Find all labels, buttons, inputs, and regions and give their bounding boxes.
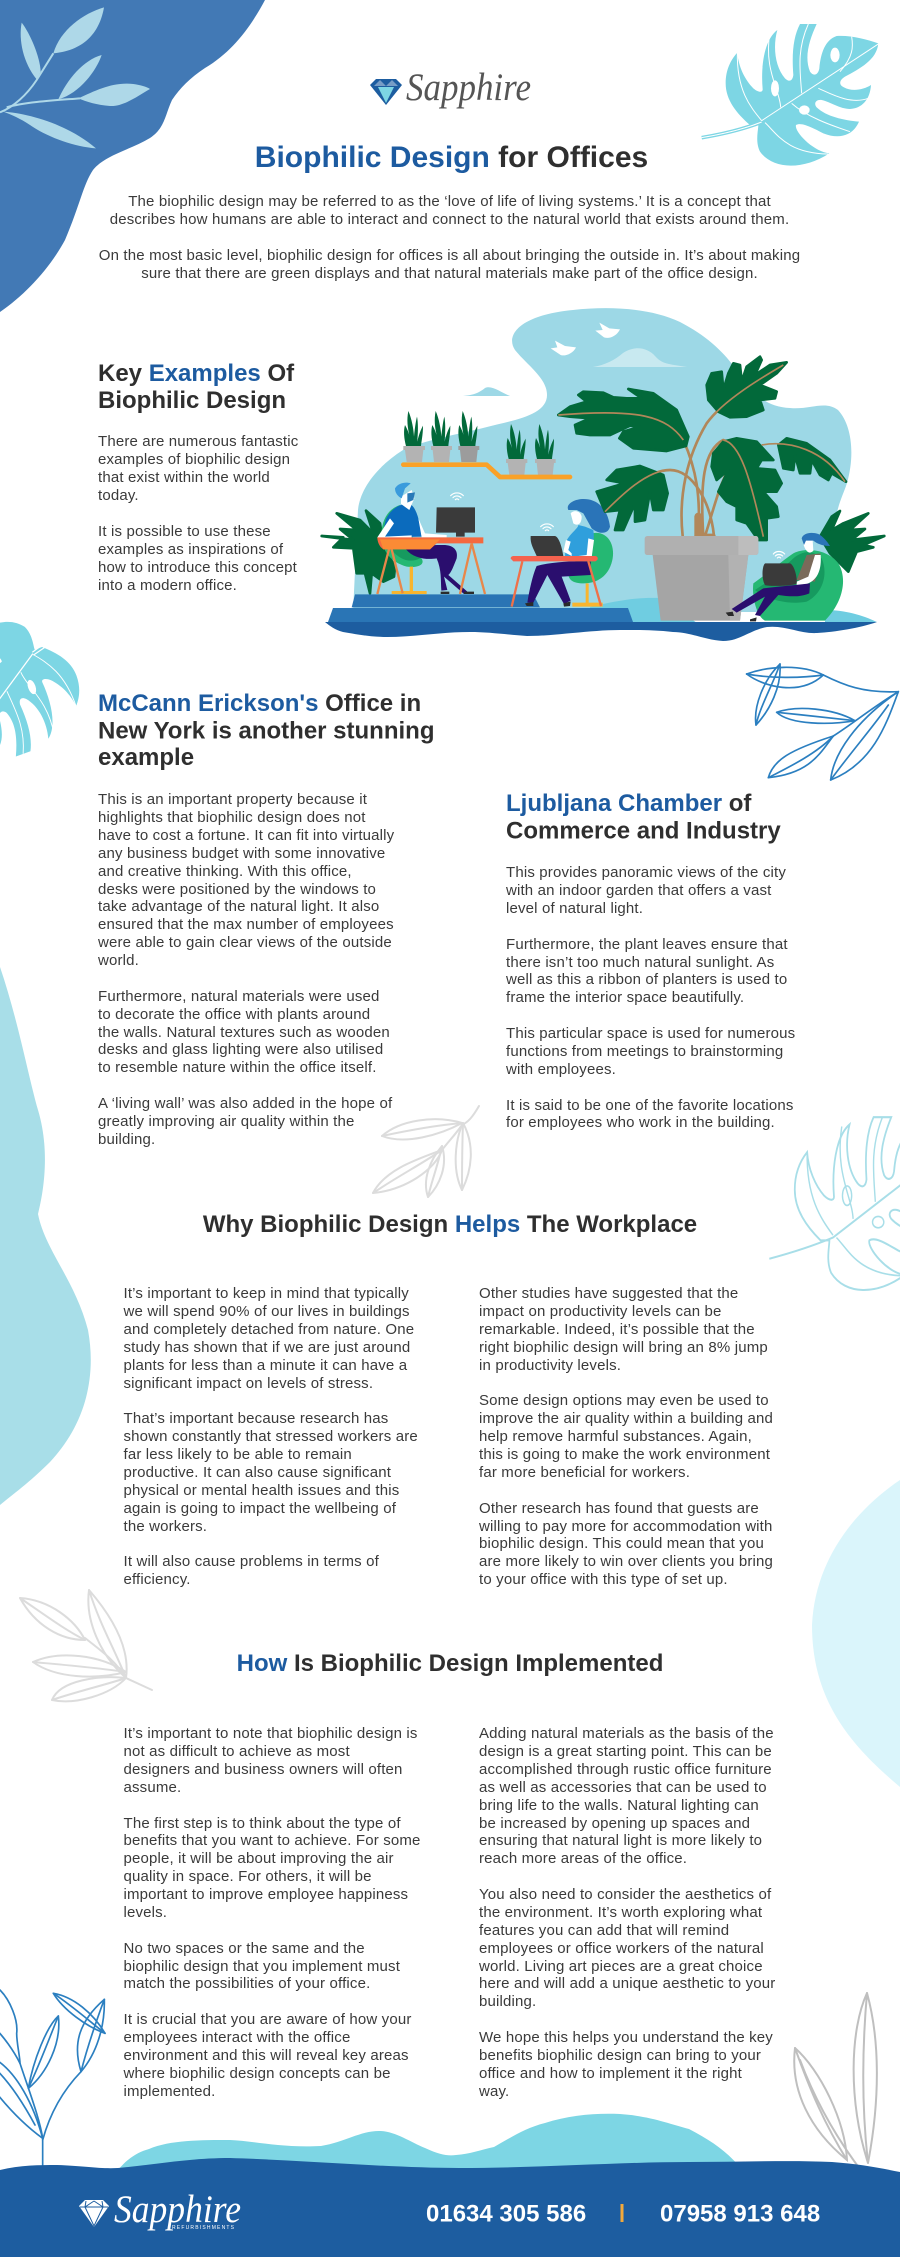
text: how left column: quality in space. For others, it will be xyxy=(124,1868,372,1885)
text: how left column xyxy=(122,1725,421,2100)
text: McCann: any business budget with some innovative xyxy=(98,845,385,862)
text: how right column xyxy=(478,1725,775,2100)
heading: Ljubljana: Commerce and Industry xyxy=(506,818,781,844)
wifi icon left xyxy=(451,493,463,500)
logo: Sapphire top xyxy=(370,66,531,109)
floor wave xyxy=(325,622,877,641)
footer hills xyxy=(118,2114,738,2175)
heading: Ljubljana: Ljubljana Chamber of xyxy=(506,790,751,817)
text: key examples: how to introduce this concept xyxy=(98,559,298,576)
leaf veins xyxy=(558,365,845,537)
big plant leaves xyxy=(558,357,846,540)
text: why left column: and completely detached from nature. One xyxy=(124,1321,414,1338)
text: how right column: bring life to the walls. Natural lighting can xyxy=(479,1797,759,1814)
text: how left column: important to improve employee happiness xyxy=(124,1886,408,1903)
birds xyxy=(551,323,620,355)
text: why left column: plants for less than a minute it can have a xyxy=(124,1357,408,1374)
text: why left column: again is going to impact the wellbeing of xyxy=(124,1500,397,1517)
background blob: top left xyxy=(0,0,265,312)
text: how right column: be increased by opening up spaces and xyxy=(479,1815,750,1832)
text: how right column: here and will add a unique aesthetic to your xyxy=(479,1975,775,1992)
text: how left column: biophilic design that you implement must xyxy=(124,1958,401,1975)
text: key examples: examples of biophilic design xyxy=(98,451,290,468)
text: why right column: biophilic design. This could mean that you xyxy=(479,1535,764,1552)
text: how left column: The first step is to think about the type of xyxy=(124,1815,401,1832)
text: how left column: benefits that you want to achieve. For some xyxy=(124,1832,421,1849)
text: how right column: way. xyxy=(478,2083,509,2100)
icon: diamond xyxy=(370,79,402,105)
text: how right column: reach more areas of the office. xyxy=(479,1850,687,1867)
left bush xyxy=(322,511,395,593)
text: why right column: right biophilic design will bring an 8% jump xyxy=(479,1339,768,1356)
text: Ljubljana: This provides panoramic views of the city xyxy=(506,864,786,881)
text: McCann: building. xyxy=(98,1131,155,1148)
monstera outline: right xyxy=(769,1117,900,1290)
text: how left column: levels. xyxy=(124,1904,167,1921)
text: how right column: employees or office workers of the natural xyxy=(479,1940,764,1957)
text: Ljubljana: frame the interior space beautifully. xyxy=(506,989,744,1006)
heading: key examples: Biophilic Design xyxy=(98,387,286,414)
text: McCann: A ‘living wall’ was also added in the hope of xyxy=(98,1095,393,1112)
intro text: On the most basic level, biophilic design for offices is all about bringing the outside in. It’s about making xyxy=(99,247,800,264)
text: Ljubljana: well as this a ribbon of planters is used to xyxy=(505,971,787,988)
logo wordmark: Sapphire xyxy=(406,66,531,109)
text: how right column: Adding natural materials as the basis of the xyxy=(479,1725,774,1742)
text: McCann xyxy=(97,791,395,1148)
intro text: describes how humans are able to interact and connect to the natural world that exists around them. xyxy=(110,211,789,228)
text: why right column: Other studies have suggested that the xyxy=(479,1285,738,1302)
text: why right column: in productivity levels. xyxy=(479,1357,621,1374)
desk: coral xyxy=(511,556,598,561)
text: McCann: to resemble nature within the office itself. xyxy=(98,1059,377,1076)
text: how right column: features you can add that will remind xyxy=(479,1922,729,1939)
text: key examples: examples as inspirations of xyxy=(98,541,284,558)
text: Ljubljana: with employees. xyxy=(505,1061,616,1078)
text: how left column: It is crucial that you are aware of how your xyxy=(124,2011,412,2028)
monstera leaf: mid left xyxy=(0,596,116,776)
footer tagline: REFURBISHMENTS xyxy=(172,2225,235,2231)
text: why left column: significant impact on levels of stress. xyxy=(124,1375,373,1392)
text: how left column: environment and this will reveal key areas xyxy=(124,2047,409,2064)
text: how left column: not as difficult to achieve as most xyxy=(124,1743,350,1760)
text: how left column: No two spaces or the same and the xyxy=(124,1940,365,1957)
right bush xyxy=(820,511,884,572)
separator xyxy=(620,2204,624,2222)
text: McCann: were able to gain clear views of the outside xyxy=(97,934,392,951)
heading: McCann: example xyxy=(98,744,194,771)
text: how right column: design is a great starting point. This can be xyxy=(479,1743,772,1760)
text: why right column: help remove harmful substances. Again, xyxy=(479,1428,752,1445)
background blob: mid left xyxy=(0,967,91,1505)
footer logo xyxy=(79,2188,241,2231)
text: how right column: benefits biophilic design can bring to your xyxy=(479,2047,761,2064)
illustration: biophilic office xyxy=(322,308,884,641)
monitor xyxy=(436,507,475,537)
text: why left column: physical or mental health issues and this xyxy=(124,1482,399,1499)
text: how right column: building. xyxy=(479,1993,536,2010)
cloud large xyxy=(593,348,687,367)
text: McCann: This is an important property because it xyxy=(98,791,368,808)
text: how right column: accomplished through rustic office furniture xyxy=(479,1761,772,1778)
text: key examples: There are numerous fantastic xyxy=(98,433,299,450)
text: Ljubljana: there isn’t too much natural sunlight. As xyxy=(506,954,774,971)
text: how left column: people, it will be about improving the air xyxy=(124,1850,394,1867)
text: McCann: to decorate the office with plants around xyxy=(98,1006,370,1023)
left scene xyxy=(322,411,613,607)
text: McCann: have to cost a fortune. It can fit into virtually xyxy=(98,827,395,844)
text: why right column: to your office with this type of set up. xyxy=(479,1571,728,1588)
man's chair stand xyxy=(392,567,427,594)
heading: why: Why Biophilic Design Helps The Workplace xyxy=(203,1211,697,1238)
blue outline plant: bottom left xyxy=(0,1990,105,2165)
lower step xyxy=(328,608,633,622)
text: why left column: shown constantly that stressed workers are xyxy=(124,1428,418,1445)
background blob: right xyxy=(812,1480,900,1787)
big plant stems xyxy=(558,365,783,537)
text: McCann: highlights that biophilic design does not xyxy=(98,809,366,826)
text: Ljubljana xyxy=(505,864,795,1131)
text: how left column: where biophilic design concepts can be xyxy=(122,2065,391,2082)
text: Ljubljana: functions from meetings to brainstorming xyxy=(506,1043,783,1060)
phone 1: 01634 305 586 xyxy=(426,2200,586,2228)
text: why right column: are more likely to win over clients you bring xyxy=(479,1553,773,1570)
text: how left column: match the possibilities of your office. xyxy=(124,1975,370,1992)
text: McCann: take advantage of the natural light. It also xyxy=(98,898,379,915)
text: how right column: We hope this helps you understand the key xyxy=(479,2029,773,2046)
text: McCann: desks were positioned by the windows to xyxy=(98,881,376,898)
wifi icon centre xyxy=(541,524,553,531)
text: why left column: study has shown that if we are just around xyxy=(124,1339,410,1356)
text: why right column: this is going to make the work environment xyxy=(479,1446,771,1463)
text: McCann: Furthermore, natural materials were used xyxy=(98,988,380,1005)
text: Ljubljana: with an indoor garden that offers a vast xyxy=(505,882,772,899)
heading: key examples: Key Examples Of xyxy=(98,360,294,387)
text: why left column: It will also cause problems in terms of xyxy=(124,1553,380,1570)
cloud small xyxy=(463,387,510,396)
text: why left column: the workers. xyxy=(124,1518,207,1535)
heading: McCann: McCann Erickson's Office in xyxy=(98,690,421,717)
text: why left column: far less likely to be able to remain xyxy=(124,1446,352,1463)
text: Ljubljana: Furthermore, the plant leaves ensure that xyxy=(506,936,788,953)
text: why right column: Some design options may even be used to xyxy=(479,1392,769,1409)
text: Ljubljana: This particular space is used for numerous xyxy=(506,1025,795,1042)
title: Biophilic Design for Offices xyxy=(255,141,648,174)
heading: how: How Is Biophilic Design Implemented xyxy=(237,1650,663,1677)
grey sprig: left xyxy=(20,1590,152,1701)
phone 2: 07958 913 648 xyxy=(660,2200,820,2228)
text: why right column xyxy=(478,1285,773,1588)
shelf plants xyxy=(404,411,554,459)
text: why left column: It’s important to keep in mind that typically xyxy=(124,1285,409,1302)
text: key examples: into a modern office. xyxy=(98,577,237,594)
text: why left column: we will spend 90% of our lives in buildings xyxy=(122,1303,410,1320)
text: how left column: designers and business owners will often xyxy=(124,1761,403,1778)
text: why left column: productive. It can also cause significant xyxy=(124,1464,392,1481)
right scene xyxy=(558,357,884,621)
text: why right column: impact on productivity levels can be xyxy=(479,1303,722,1320)
upper step xyxy=(352,594,540,607)
text: Ljubljana: level of natural light. xyxy=(506,900,643,917)
text: why left column xyxy=(122,1285,418,1588)
heading: McCann: New York is another stunning xyxy=(98,718,434,744)
text: key examples: today. xyxy=(98,487,139,504)
text: key examples xyxy=(98,433,299,594)
text: why left column: That’s important because research has xyxy=(124,1410,388,1427)
text: how left column: assume. xyxy=(124,1779,181,1796)
grey sprig: centre xyxy=(373,1106,479,1197)
text: Ljubljana: for employees who work in the building. xyxy=(506,1114,775,1131)
big pot xyxy=(645,536,758,621)
text: Ljubljana: It is said to be one of the favorite locations xyxy=(506,1097,794,1114)
grey outline plant: bottom right xyxy=(794,1993,877,2165)
shelf xyxy=(403,465,570,477)
text: how right column: ensuring that natural light is more likely to xyxy=(479,1832,762,1849)
text: McCann: greatly improving air quality within the xyxy=(98,1113,355,1130)
text: how right column: world. Living art pieces are a great choice xyxy=(478,1958,763,1975)
intro text xyxy=(99,193,800,282)
text: McCann: world. xyxy=(97,952,139,969)
man xyxy=(377,483,474,594)
text: why left column: efficiency. xyxy=(124,1571,191,1588)
text: why right column: Other research has found that guests are xyxy=(479,1500,759,1517)
intro text: sure that there are green displays and that natural materials make part of the office design. xyxy=(141,265,758,282)
text: why right column: far more beneficial for workers. xyxy=(479,1464,690,1481)
text: how left column: employees interact with the office xyxy=(124,2029,350,2046)
text: how right column: as well as accessories that can be used to xyxy=(479,1779,767,1796)
text: how left column: implemented. xyxy=(124,2083,215,2100)
woman xyxy=(525,499,610,607)
text: how right column: You also need to consider the aesthetics of xyxy=(479,1886,772,1903)
text: how right column: the environment. It’s worth exploring what xyxy=(479,1904,763,1921)
monstera leaf: top right xyxy=(702,24,879,166)
sprig: top left leaves xyxy=(0,7,150,148)
text: McCann: the walls. Natural textures such as wooden xyxy=(98,1024,390,1041)
text: how right column: office and how to implement it the right xyxy=(479,2065,743,2082)
text: why right column: willing to pay more for accommodation with xyxy=(478,1518,773,1535)
scene background blob xyxy=(353,308,851,612)
intro text: The biophilic design may be referred to as the ‘love of life of living systems.’ It is a concept that xyxy=(128,193,771,210)
blue outline sprig: top right xyxy=(747,664,898,780)
pots xyxy=(403,446,556,475)
footer wordmark: Sapphire xyxy=(114,2188,241,2231)
text: how left column: It’s important to note that biophilic design is xyxy=(124,1725,418,1742)
seated woman xyxy=(726,533,843,621)
text: why right column: improve the air quality within a building and xyxy=(479,1410,773,1427)
text: McCann: ensured that the max number of employees xyxy=(98,916,394,933)
text: key examples: that exist within the world xyxy=(98,469,270,486)
desk: orange xyxy=(377,537,483,549)
woman's chair xyxy=(568,533,613,583)
footer band xyxy=(0,2158,900,2257)
text: why right column: remarkable. Indeed, it’s possible that the xyxy=(479,1321,755,1338)
icon: white diamond xyxy=(79,2200,109,2227)
ground hills xyxy=(590,598,877,625)
text: key examples: It is possible to use these xyxy=(98,523,271,540)
text: McCann: and creative thinking. With this office, xyxy=(98,863,352,880)
text: McCann: desks and glass lighting were also utilised xyxy=(98,1041,383,1058)
